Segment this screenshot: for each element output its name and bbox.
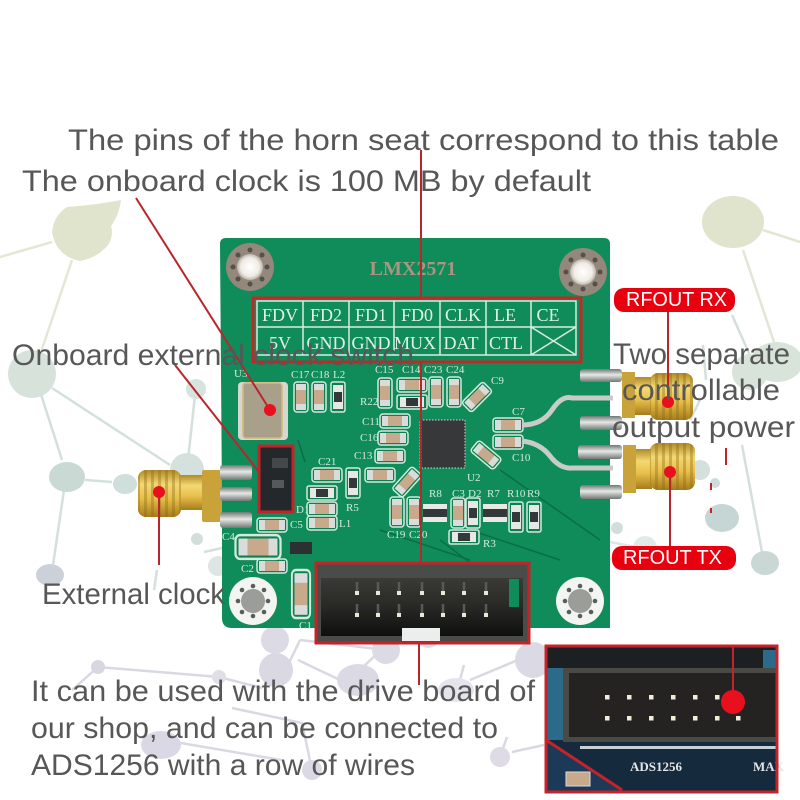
jumper header with red highlight <box>259 446 293 512</box>
pin table: FD1 <box>355 305 387 325</box>
mounting holes <box>226 243 607 625</box>
pin table: CLK <box>445 305 481 325</box>
pin table: 5V <box>269 333 291 353</box>
pin table: CTL <box>489 333 523 353</box>
silkscreen component labels: C4 <box>222 531 235 543</box>
solder pads <box>220 369 622 528</box>
pin table: FDV <box>262 305 298 325</box>
silkscreen component labels: C21 <box>318 456 336 468</box>
silkscreen component labels: L2 <box>333 369 345 381</box>
background: faint network of nodes <box>0 196 800 780</box>
silkscreen component labels: C20 <box>409 529 428 541</box>
green leaf node <box>52 200 121 261</box>
pin table: FD0 <box>401 305 433 325</box>
caption: pins of the horn seat: The pins of the horn seat correspond to this table <box>68 124 779 157</box>
caption: drive board usage: ADS1256 with a row of wires <box>31 749 415 782</box>
pin table: CE <box>536 305 560 325</box>
silkscreen component labels: R22 <box>360 396 378 408</box>
silkscreen component labels: C11 <box>362 416 380 428</box>
silkscreen component labels: U3 <box>234 368 248 380</box>
inset photo: ADS1256 driver board header <box>546 646 785 792</box>
board name silkscreen: LMX2571 <box>370 258 456 280</box>
label: RFOUT TX: RFOUT TX <box>623 547 722 569</box>
caption: drive board usage <box>31 675 536 782</box>
red leader lines and dots <box>136 150 726 685</box>
caption: clock switch: Onboard external clock switch <box>12 339 414 372</box>
silkscreen component labels: R7 <box>487 488 500 500</box>
caption: two separate controllable output power: output power <box>612 411 795 444</box>
silkscreen component labels: C24 <box>446 364 465 376</box>
pin table: GND <box>352 333 390 353</box>
silkscreen component labels: R3 <box>483 538 496 550</box>
silkscreen component labels: C7 <box>512 406 525 418</box>
IDC box header <box>316 563 529 643</box>
caption: two separate controllable output power: Two separate <box>613 338 790 371</box>
pin table <box>253 298 581 362</box>
caption: two separate controllable output power: controllable <box>622 374 780 407</box>
caption: drive board usage: It can be used with the drive board of <box>31 675 536 708</box>
silkscreen component labels: C9 <box>491 375 504 387</box>
RF output traces <box>522 398 613 468</box>
silkscreen component labels: C5 <box>290 519 303 531</box>
silkscreen component labels: C23 <box>424 364 443 376</box>
silkscreen component labels <box>222 364 540 632</box>
silkscreen component labels: C18 <box>311 369 330 381</box>
silkscreen component labels: L1 <box>339 518 351 530</box>
silkscreen component labels: C16 <box>360 432 379 444</box>
pin table: GND <box>306 333 346 353</box>
silkscreen component labels: C14 <box>402 364 421 376</box>
caption: external clock: External clock <box>42 578 226 611</box>
silkscreen component labels: C3 <box>452 488 465 500</box>
crystal oscillator U3 <box>238 382 288 440</box>
silkscreen component labels: C17 <box>291 369 310 381</box>
silkscreen component labels: R10 <box>507 488 526 500</box>
silkscreen component labels: D1 <box>296 504 309 516</box>
pin table: MUX <box>394 333 436 353</box>
silkscreen component labels: R9 <box>527 488 540 500</box>
caption: onboard clock: The onboard clock is 100 MB by default <box>22 165 592 198</box>
inset photo: ADS1256 driver board header: MAX <box>753 759 785 774</box>
silkscreen component labels: C2 <box>241 563 254 575</box>
right SMA connector: RFOUT RX <box>622 372 693 420</box>
silkscreen component labels: R5 <box>346 502 359 514</box>
capacitors and resistors <box>236 377 541 618</box>
silkscreen component labels: C10 <box>512 452 531 464</box>
green circuit board <box>220 238 622 632</box>
left SMA connector: external clock input <box>138 470 222 522</box>
silkscreen component labels: D2 <box>468 488 481 500</box>
right SMA connector: RFOUT TX <box>623 443 695 493</box>
silkscreen component labels: R8 <box>429 488 442 500</box>
silkscreen component labels: U2 <box>467 472 480 484</box>
resistor arrays R8 and R7 <box>423 504 507 522</box>
silkscreen component labels: C13 <box>354 450 373 462</box>
main chip U2 <box>420 420 465 468</box>
pin table: FD2 <box>310 305 342 325</box>
pin table: DAT <box>444 333 479 353</box>
pin table: LE <box>494 305 516 325</box>
silkscreen component labels: C19 <box>387 529 406 541</box>
inset photo: ADS1256 driver board header: ADS1256 <box>630 759 683 774</box>
caption: drive board usage: our shop, and can be connected to <box>31 712 498 745</box>
caption: two separate controllable output power <box>612 338 795 444</box>
transistor <box>290 542 312 554</box>
silkscreen component labels: C1 <box>299 620 312 632</box>
silkscreen component labels: C15 <box>375 364 394 376</box>
label: RFOUT RX: RFOUT RX <box>626 289 727 311</box>
